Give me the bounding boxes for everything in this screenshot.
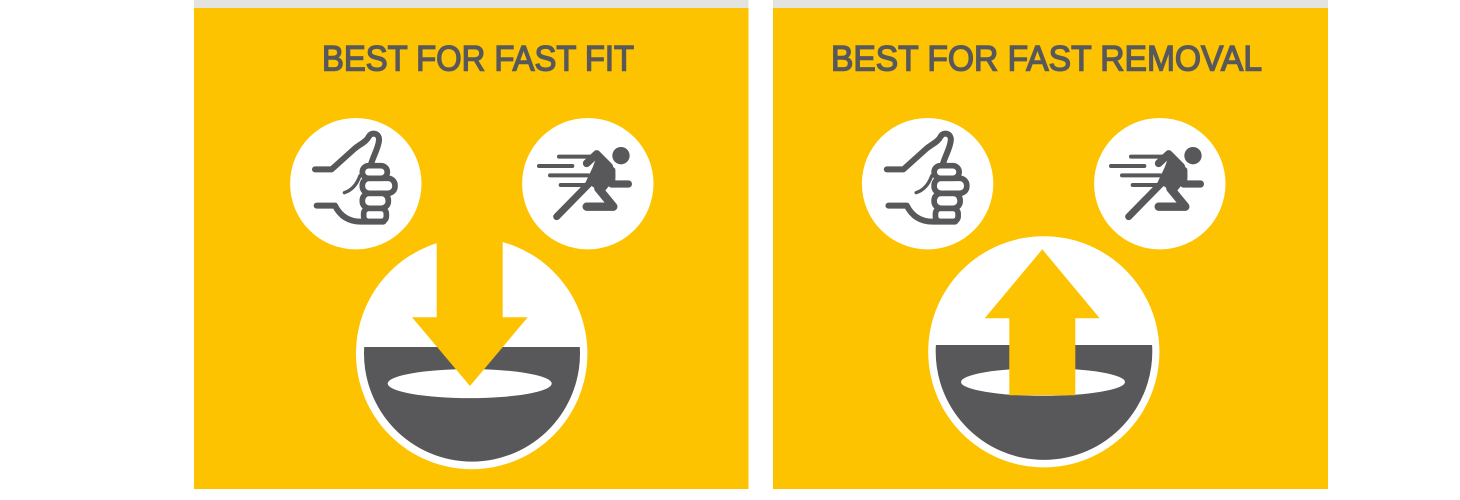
icon: running person [522, 118, 654, 249]
top grey strip right [773, 0, 1328, 8]
icon: arrow pushing down into hole [356, 225, 587, 469]
icon: thumbs up [862, 118, 993, 249]
heading: best for fast removal: BEST FOR FAST REMOVAL [831, 40, 1262, 78]
panel: best for fast fit [194, 8, 748, 489]
top grey strip left [194, 0, 748, 8]
icon: running person [1094, 118, 1226, 249]
icon: thumbs up [290, 118, 421, 249]
panel: best for fast removal [773, 8, 1328, 489]
heading: best for fast fit: BEST FOR FAST FIT [322, 40, 634, 78]
icon: arrow pulling up out of hole [928, 236, 1159, 467]
